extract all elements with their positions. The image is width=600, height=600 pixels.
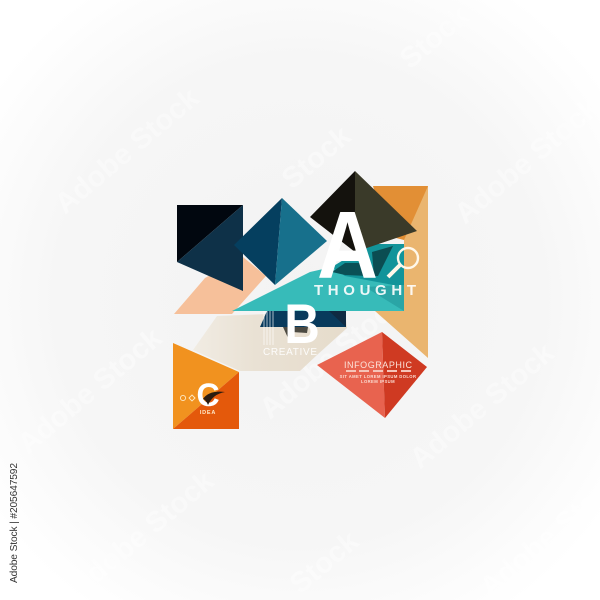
stock watermarks: Adobe Stock	[12, 321, 169, 460]
panel: orange square	[173, 343, 239, 429]
body text	[340, 374, 416, 384]
icon: C swoosh	[203, 392, 225, 405]
label: CREATIVE: CREATIVE	[263, 347, 317, 358]
panel: dark square	[177, 205, 243, 291]
divider dashes	[346, 370, 411, 372]
panel: dark pyramid	[310, 171, 417, 252]
stock id caption: Adobe Stock | #205647592	[9, 463, 20, 583]
letter B: B	[284, 293, 320, 356]
stock watermarks: Stock	[276, 120, 358, 195]
stock watermarks: Adobe Stock	[64, 464, 221, 600]
stock watermarks: Adobe Stock	[49, 81, 206, 220]
label: IDEA: IDEA	[200, 410, 216, 416]
panel: dark blue band behind B	[260, 311, 346, 345]
heading: THOUGHT: THOUGHT	[314, 282, 416, 299]
stock watermarks: Adobe Stock	[254, 286, 411, 425]
stock watermarks: Stock	[284, 525, 366, 600]
stock watermarks: Stock	[394, 0, 476, 75]
stock watermarks: Adobe Stock	[404, 336, 561, 475]
panel: peach triangle	[174, 257, 266, 314]
body text: SIT AMET LOREM IPSUM DOLOR	[340, 374, 416, 379]
panel: beige shape	[193, 311, 347, 371]
body text: LOREM IPSUM	[361, 379, 395, 384]
panel: red diamond	[317, 332, 427, 418]
panel: teal triangle	[232, 244, 404, 311]
panel: tan folded shape	[373, 186, 428, 358]
icon: magnifying glass	[388, 248, 418, 277]
panel: blue pyramid	[234, 198, 327, 285]
letter C: C	[196, 377, 220, 413]
icon: small diamonds	[180, 395, 195, 401]
heading: INFOGRAPHIC: INFOGRAPHIC	[344, 360, 412, 370]
letter A: A	[317, 192, 378, 299]
